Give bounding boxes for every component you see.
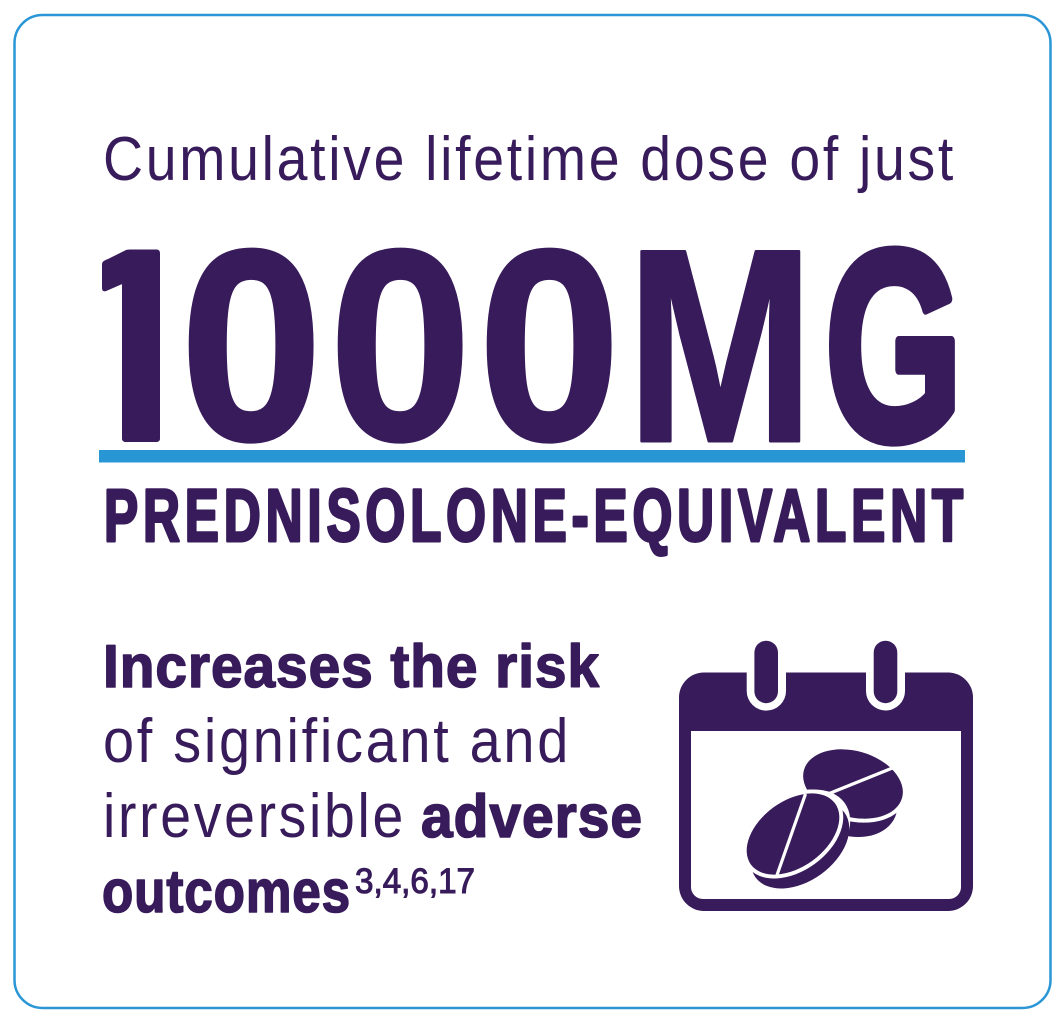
back pill bbox=[790, 733, 916, 848]
heading: cumulative lifetime dose: Cumulative lifetime dose of just bbox=[103, 125, 956, 194]
text block: risk statement: 3,4,6,17 bbox=[355, 862, 475, 901]
calendar body bbox=[679, 672, 973, 911]
calendar ring right bbox=[866, 641, 905, 710]
text block: risk statement: adverse bbox=[421, 783, 643, 850]
big figure: 1000MG: M bbox=[626, 192, 814, 500]
big figure: 1000MG: 0 bbox=[329, 193, 472, 498]
icon: calendar with pills bbox=[679, 641, 973, 911]
big figure: 1000MG: 0 bbox=[180, 193, 323, 498]
big figure: 1000MG: 0 bbox=[478, 193, 621, 498]
big figure: 1000MG bbox=[102, 246, 955, 447]
text block: risk statement: irreversible bbox=[103, 782, 406, 851]
big figure: 1000MG: G bbox=[825, 195, 963, 497]
text block: risk statement: outcomes bbox=[102, 858, 351, 925]
calendar ring left bbox=[747, 641, 786, 711]
text block: risk statement: of significant and bbox=[103, 707, 571, 776]
big figure: 1000MG: 1 bbox=[73, 191, 201, 502]
text block: risk statement bbox=[102, 633, 643, 925]
text block: risk statement: Increases the risk bbox=[103, 633, 600, 700]
front pill bbox=[723, 770, 869, 906]
rule: blue divider bbox=[99, 450, 965, 462]
